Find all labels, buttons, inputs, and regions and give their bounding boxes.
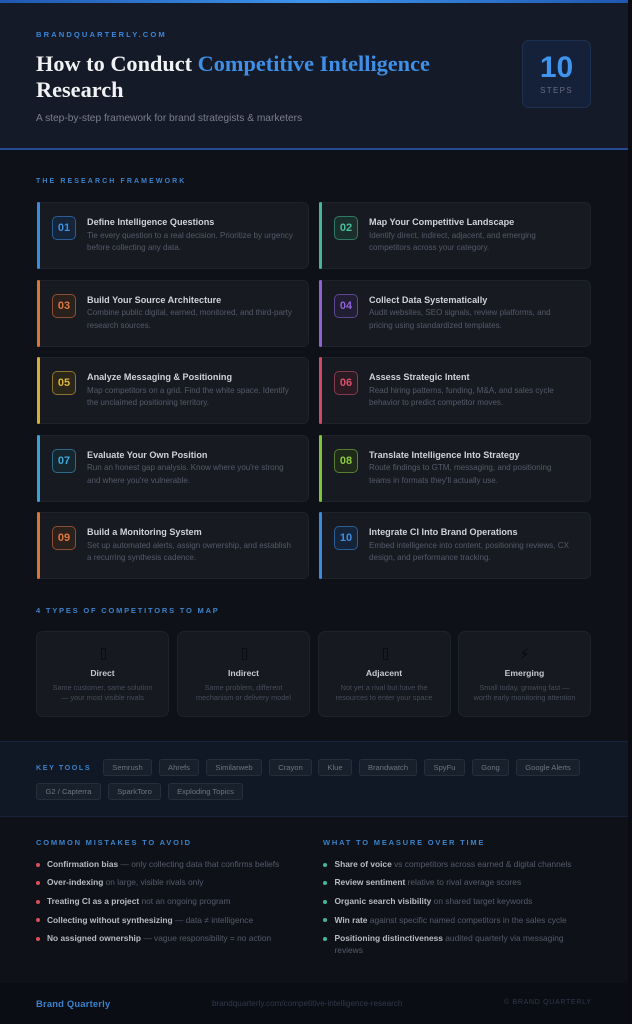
panel: step 09	[37, 512, 309, 579]
panel: step 05: the unclaimed positioning territory.	[87, 398, 209, 407]
tool chips: Ahrefs	[168, 763, 190, 772]
panel: step 10	[319, 512, 591, 579]
panel: step 06: Read hiring patterns, funding, M&A, and sales cycle	[369, 386, 554, 394]
panel: step 02: competitors across your category.	[369, 243, 489, 252]
steps number: 10	[540, 51, 573, 84]
panel: step 10: 10	[340, 532, 352, 544]
panel: step 04	[319, 280, 591, 346]
mistakes list: Collecting without synthesizing — data ≠ intelligence	[47, 914, 253, 924]
tool chips: Klue	[327, 763, 343, 772]
panel: step 05	[37, 357, 309, 424]
panel: step 05: Analyze Messaging & Positioning	[87, 372, 232, 382]
panel: indirect: mechanism or delivery model	[196, 693, 291, 702]
panel: step 04: Audit websites, SEO signals, review platforms, and	[369, 308, 551, 317]
panel: step 09: a recurring synthesis cadence.	[87, 553, 196, 562]
panel: step 04: pricing using standardized templates.	[369, 321, 502, 330]
site label: BRANDQUARTERLY.COM	[36, 30, 167, 39]
panel: step 02	[319, 202, 591, 269]
panel: step 04: 04	[340, 300, 352, 312]
title: How to Conduct Competitive Intelligence	[36, 51, 430, 76]
mistakes list: Treating CI as a project not an ongoing program	[47, 896, 230, 906]
panel: adjacent: Not yet a rival but have the	[341, 682, 427, 692]
panel: adjacent	[318, 631, 450, 717]
tool chips	[36, 759, 580, 800]
panel: step 03	[37, 280, 309, 346]
panel: step 09: 09	[58, 532, 70, 544]
footer brand: Brand Quarterly	[36, 998, 110, 1009]
panel: step 06	[319, 357, 591, 424]
panel: step 06: Assess Strategic Intent	[369, 372, 470, 382]
tool chips: SpyFu	[434, 763, 455, 772]
panel: step 01: 01	[58, 222, 70, 234]
header panel	[0, 0, 628, 150]
panel: key tools	[0, 741, 628, 817]
panel: step 06: 06	[340, 377, 352, 389]
mistakes list: Confirmation bias — only collecting data that confirms beliefs	[47, 859, 279, 869]
measure list: Win rate against specific named competitors in the sales cycle	[334, 914, 567, 924]
panel: step 08: 08	[340, 454, 352, 466]
tool chips: Exploding Topics	[177, 787, 234, 796]
panel: direct	[36, 631, 169, 717]
panel: step 03: Combine public digital, earned, monitored, and third-party	[87, 308, 292, 317]
measure heading: WHAT TO MEASURE OVER TIME	[323, 838, 485, 846]
panel: indirect: Same problem, different	[205, 682, 282, 692]
measure list: Share of voice vs competitors across earned & digital channels	[334, 859, 571, 869]
footer url: brandquarterly.com/competitive-intelligence-research	[212, 999, 402, 1008]
measure list: reviews	[334, 945, 363, 955]
panel: adjacent: resources to enter your space	[336, 693, 432, 702]
panel: common mistakes	[36, 838, 279, 943]
panel: step 04: Collect Data Systematically	[369, 294, 487, 304]
steps label: STEPS	[540, 86, 573, 94]
tool chips: Semrush	[112, 763, 143, 772]
panel: what to measure	[323, 838, 572, 955]
measure list: Review sentiment relative to rival average scores	[334, 877, 521, 887]
mistakes list: Over-indexing on large, visible rivals only	[47, 877, 203, 887]
panel: step 06: behavior to predict competitor moves.	[369, 398, 503, 407]
measure list: Positioning distinctiveness audited quarterly via messaging	[334, 933, 564, 943]
panel: indirect: Indirect	[228, 668, 259, 678]
panel: step 10: design, and performance tracking.	[369, 553, 491, 562]
panel: direct: Same customer, same solution	[53, 682, 152, 692]
tool chips: Crayon	[278, 763, 303, 772]
panel: step 07: Run an honest gap analysis. Know where you're strong	[87, 463, 284, 472]
panel: emerging: Emerging	[505, 668, 544, 678]
panel: step 07: Evaluate Your Own Position	[87, 450, 207, 460]
measure list	[323, 859, 572, 955]
panel: step 01: Tie every question to a real decision. Prioritize by urgency	[87, 230, 293, 240]
footer copyright: © BRAND QUARTERLY	[504, 998, 592, 1006]
panel: direct: — your most visible rivals	[61, 693, 144, 702]
panel: step 03: Build Your Source Architecture	[87, 294, 221, 304]
panel: step 03: research sources.	[87, 321, 151, 330]
panel: step 02: Identify direct, indirect, adjacent, and emerging	[369, 230, 536, 240]
panel: step 07: 07	[58, 454, 70, 466]
panel: step 08	[319, 434, 591, 502]
tool chips: SparkToro	[117, 787, 152, 796]
panel: step 05: Map competitors on a grid. Find the white space. Identify	[87, 386, 289, 394]
tool chips: G2 / Capterra	[45, 787, 92, 796]
mistakes heading: COMMON MISTAKES TO AVOID	[36, 838, 192, 846]
tool chips: Google Alerts	[525, 763, 571, 772]
heading: competitor types: 4 TYPES OF COMPETITORS TO MAP	[36, 606, 220, 614]
footer	[0, 983, 628, 1024]
panel: step 08: teams in formats they'll actually use.	[369, 476, 498, 485]
panel: adjacent: Adjacent	[366, 668, 402, 678]
panel: emerging: Small today, growing fast —	[479, 682, 570, 692]
tool chips: Brandwatch	[368, 763, 408, 772]
mistakes list	[36, 859, 279, 943]
heading: the research framework: THE RESEARCH FRAMEWORK	[36, 178, 186, 184]
panel: step 01: before collecting any data.	[87, 243, 181, 252]
panel: step 10: Integrate CI Into Brand Operations	[369, 527, 518, 537]
key tools label: KEY TOOLS	[36, 762, 91, 772]
subtitle: A step-by-step framework for brand strategists & marketers	[36, 112, 302, 124]
panel: step 07	[37, 434, 309, 502]
title: Research	[36, 77, 124, 102]
panel: emerging: worth early monitoring attention	[474, 693, 575, 702]
panel: direct: Direct	[90, 668, 115, 678]
panel: step 08: Translate Intelligence Into Strategy	[369, 450, 520, 460]
tool chips: Gong	[481, 763, 500, 772]
steps badge	[522, 40, 591, 108]
panel: step 01: Define Intelligence Questions	[87, 217, 214, 227]
panel: step 09: Build a Monitoring System	[87, 527, 202, 537]
panel: step 09: Set up automated alerts, assign ownership, and establish	[87, 540, 291, 550]
panel: step 10: Embed intelligence into content, positioning reviews, CX	[369, 540, 569, 550]
panel: step 02: Map Your Competitive Landscape	[369, 217, 514, 227]
panel: step 03: 03	[58, 300, 70, 312]
tool chips: Similarweb	[215, 763, 253, 772]
top accent bar	[0, 0, 628, 3]
panel: step 07: and where you're vulnerable.	[87, 476, 190, 485]
mistakes list: No assigned ownership — vague responsibility = no action	[47, 933, 271, 943]
panel: step 02: 02	[340, 222, 352, 234]
measure list: Organic search visibility on shared target keywords	[334, 896, 532, 906]
panel: step 01	[37, 202, 309, 269]
panel: step 05: 05	[58, 377, 70, 389]
panel: step 08: Route findings to GTM, messaging, and positioning	[369, 463, 552, 472]
panel: emerging	[458, 631, 591, 717]
title	[36, 51, 430, 102]
panel: emerging: ⚡	[519, 645, 530, 663]
panel: indirect	[177, 631, 310, 717]
